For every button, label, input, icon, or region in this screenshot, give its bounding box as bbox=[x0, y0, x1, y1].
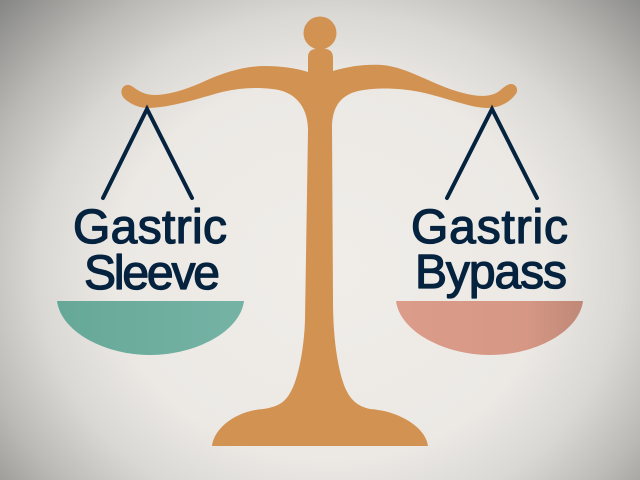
knob bbox=[304, 16, 336, 50]
right pan: pink bowl bbox=[396, 301, 583, 355]
left pan: teal bowl bbox=[57, 301, 244, 355]
left pan strings bbox=[103, 109, 192, 198]
left label: Gastric Sleeve: Gastric bbox=[73, 201, 227, 254]
neck, beam, post and base bbox=[121, 49, 517, 446]
right label: Gastric Bypass: Bypass bbox=[415, 246, 567, 299]
left label: Gastric Sleeve: Sleeve bbox=[84, 247, 220, 300]
left label: Gastric Sleeve bbox=[73, 201, 227, 300]
right label: Gastric Bypass: Gastric bbox=[411, 201, 568, 254]
right label: Gastric Bypass bbox=[411, 201, 568, 299]
balance scale body bbox=[121, 16, 517, 446]
right pan strings bbox=[447, 109, 537, 198]
